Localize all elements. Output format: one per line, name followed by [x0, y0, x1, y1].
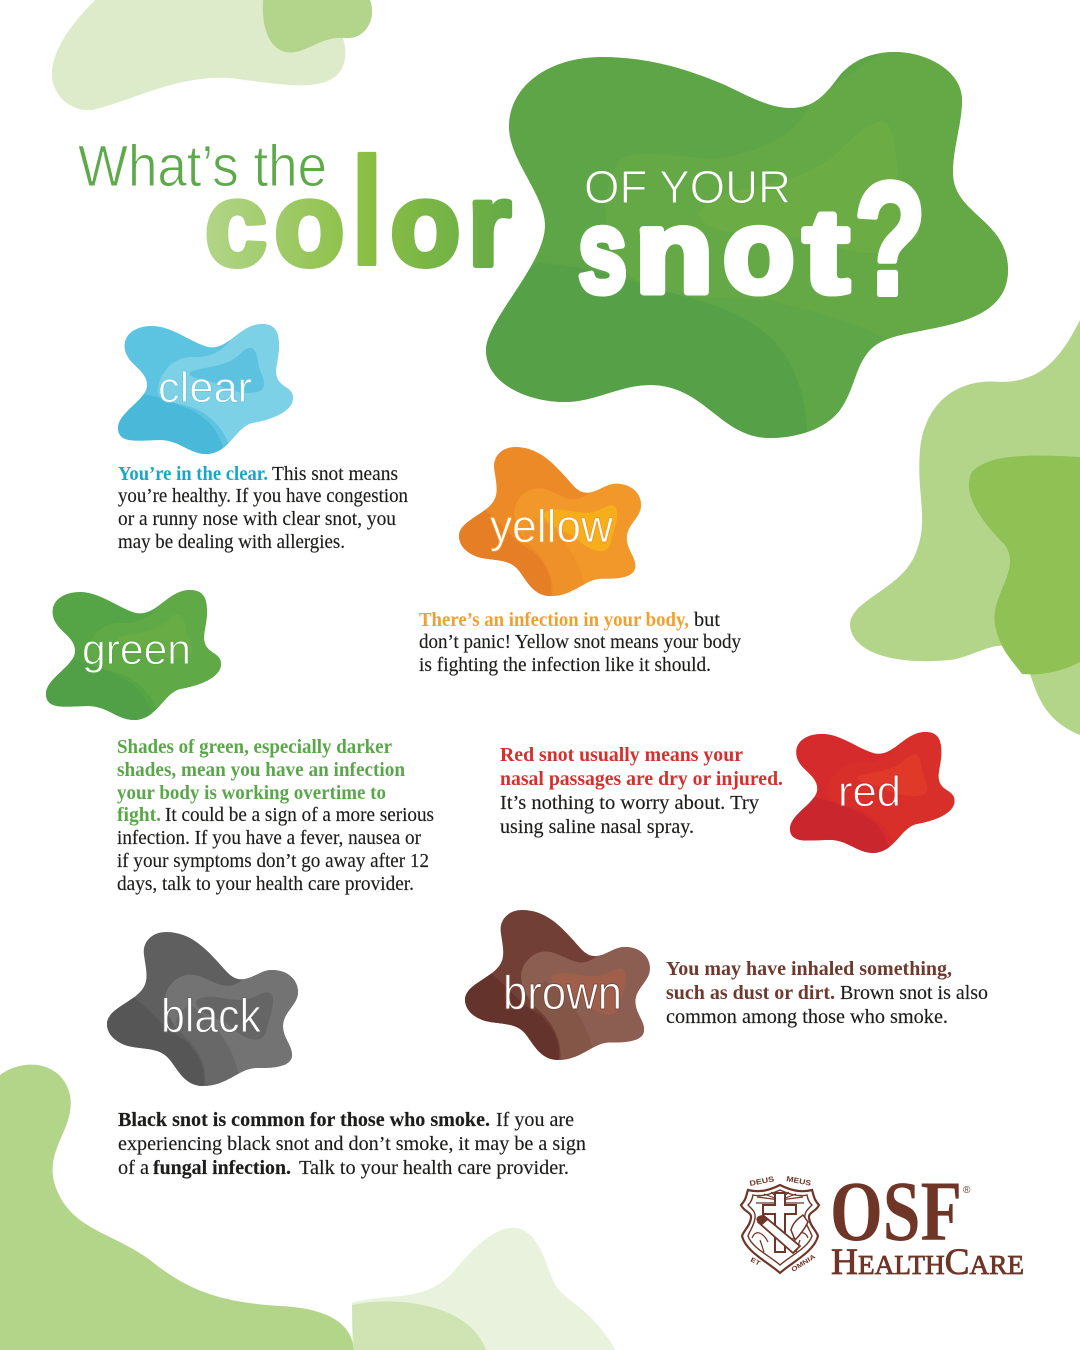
text block: brown: Brown snot is also [840, 983, 988, 1004]
text block: yellow: but [694, 610, 721, 631]
text block: black: If you are [496, 1110, 574, 1131]
logo crest: ET [749, 1257, 761, 1267]
text block: green [117, 737, 434, 895]
text block: brown: common among those who smoke. [666, 1007, 948, 1028]
text block: clear: This snot means [272, 464, 398, 485]
logo wordmark: HealthCare: HEALTHCARE [831, 1242, 1024, 1283]
text block: green: your body is working overtime to [117, 783, 386, 804]
label: brown: brown [503, 966, 622, 1019]
text block: black [118, 1110, 586, 1179]
text block: yellow: is fighting the infection like it should. [419, 655, 711, 676]
text block: black: experiencing black snot and don’t smoke, it may be a sign [118, 1134, 586, 1155]
text block: black: Talk to your health care provider. [299, 1158, 569, 1179]
logo crest: OMNIA [790, 1253, 817, 1274]
text block: red: Red snot usually means your [500, 745, 743, 766]
text block: red [500, 745, 783, 838]
title line: What's the: What’s the [78, 134, 327, 199]
registered mark: ® [963, 1185, 971, 1196]
title word: color: o [390, 159, 460, 291]
text block: red: nasal passages are dry or injured. [500, 769, 783, 790]
text: snot?: ? [854, 149, 926, 328]
text block: yellow: don’t panic! Yellow snot means your body [419, 632, 741, 653]
text block: clear: may be dealing with allergies. [118, 532, 345, 553]
main blob: of your snot? [470, 40, 1020, 445]
text: snot?: o [723, 186, 794, 318]
text: OF YOUR: OF YOUR [584, 161, 791, 213]
title word: color: o [274, 159, 344, 291]
title word: color: l [351, 127, 383, 297]
label: clear: clear [158, 364, 252, 412]
text block: clear: You’re in the clear. [118, 464, 268, 485]
text: snot?: n [635, 186, 713, 318]
text block: clear: you’re healthy. If you have congestion [118, 486, 408, 507]
logo crest: DEUS [749, 1174, 775, 1188]
title word: color: r [468, 159, 511, 291]
text block: clear: or a runny nose with clear snot, you [118, 509, 396, 530]
blob: brown [458, 910, 657, 1064]
text: snot?: s [578, 186, 627, 318]
title word: color: c [205, 159, 267, 291]
title: What's the color [78, 127, 511, 297]
background blob: right side [850, 320, 1080, 735]
title word: color [205, 127, 511, 297]
text: snot?: t [804, 186, 849, 318]
text block: green: if your symptoms don’t go away after 12 [117, 851, 429, 872]
text block: black: fungal infection. [153, 1158, 291, 1179]
blob: yellow [452, 447, 648, 600]
text block: black: of a [118, 1158, 149, 1179]
background blob: bottom left and bottom centre [0, 1065, 615, 1350]
blob: red [790, 732, 954, 853]
label: green: green [82, 626, 191, 674]
text block: brown: such as dust or dirt. [666, 983, 835, 1004]
text block: green: days, talk to your health care provider. [117, 874, 414, 895]
blob: green [46, 590, 221, 720]
text block: black: Black snot is common for those who smoke. [118, 1110, 490, 1131]
logo crest [741, 1174, 819, 1274]
text block: green: It could be a sign of a more serious [165, 805, 434, 826]
text block: red: It’s nothing to worry about. Try [500, 793, 759, 814]
label: black: black [161, 989, 261, 1042]
text block: yellow [419, 610, 741, 676]
blob: clear [118, 324, 293, 454]
text block: yellow: There’s an infection in your body, [419, 610, 689, 631]
background blob: top left [52, 0, 372, 110]
blob: black [100, 932, 305, 1090]
text block: green: infection. If you have a fever, nausea or [117, 828, 421, 849]
label: red: red [838, 768, 901, 816]
text block: green: Shades of green, especially darker [117, 737, 392, 758]
text block: brown: You may have inhaled something, [666, 959, 952, 980]
text block: brown [666, 959, 988, 1028]
logo wordmark: OSF: OSF [830, 1163, 962, 1259]
text block: red: using saline nasal spray. [500, 817, 694, 838]
text block: green: shades, mean you have an infection [117, 760, 405, 781]
label: yellow: yellow [490, 500, 614, 552]
text block: clear [118, 464, 408, 553]
text: snot? [578, 149, 926, 328]
logo: OSF HealthCare [741, 1163, 1024, 1283]
text block: green: fight. [117, 805, 161, 826]
logo crest: MEUS [786, 1174, 812, 1188]
